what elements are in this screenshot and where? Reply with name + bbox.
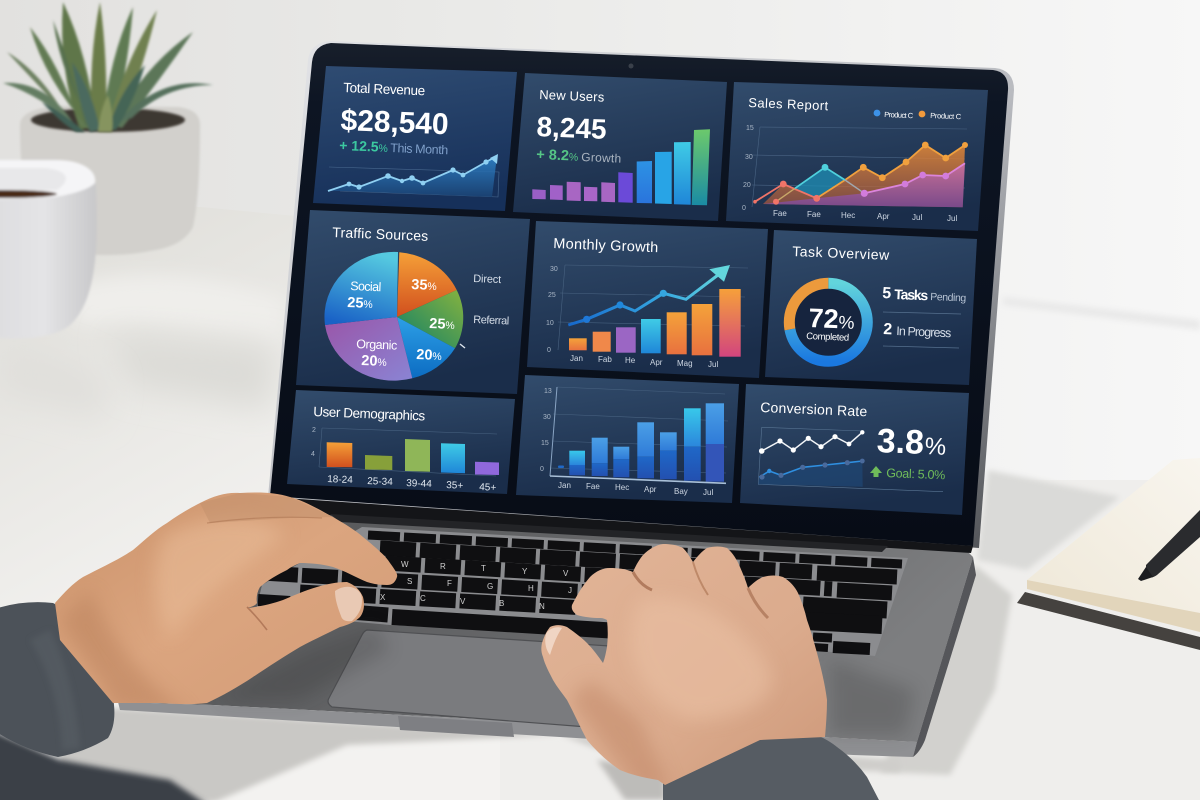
heading: traffic sources: Traffic Sources — [332, 224, 429, 244]
stat: tasks pending — [882, 285, 967, 304]
bar and line chart: growth: Apr — [650, 358, 663, 367]
pie chart: traffic: 20% — [361, 353, 387, 370]
area chart: sales: 0 — [742, 205, 746, 212]
page edges — [1027, 580, 1200, 632]
screen bezel — [270, 43, 1008, 546]
key letters: C — [420, 594, 426, 603]
value: users: 8,245 — [536, 111, 607, 145]
stacked bar chart: Jan — [558, 481, 571, 490]
key letters: T — [481, 564, 486, 573]
dashboard panel: user demographics — [287, 390, 515, 494]
left sleeve — [0, 602, 215, 800]
webcam — [628, 64, 634, 68]
dashboard panel: sales report — [726, 82, 988, 231]
silver lid edge — [268, 41, 1014, 548]
dashboard panel: total revenue — [313, 66, 517, 211]
stacked bar chart — [540, 387, 728, 497]
legend: products — [874, 110, 962, 121]
dashboard panel: monthly growth — [527, 221, 768, 378]
value: revenue: $28,540 — [340, 104, 449, 141]
notebook cover — [1017, 592, 1200, 650]
trackpad — [328, 630, 610, 728]
bar chart: demographics: 45+ — [479, 482, 497, 494]
change: users: + 8.2% — [536, 147, 579, 165]
key letters: W — [401, 560, 409, 569]
notebook paper — [1027, 458, 1200, 613]
bar chart: demographics: 25-34 — [367, 476, 393, 488]
area chart: sales: Fae — [773, 209, 787, 218]
key letters: V — [460, 597, 466, 606]
bar and line chart: growth — [546, 265, 748, 369]
right hand — [541, 544, 827, 785]
laptop base — [118, 505, 976, 757]
stat: tasks pending: Pending — [930, 291, 967, 304]
dashboard panel: stacked bars — [516, 375, 739, 503]
bar and line chart: growth: Jul — [708, 360, 718, 369]
area chart: sales: 30 — [745, 154, 753, 161]
area chart: sales: Apr — [877, 212, 890, 221]
stacked bar chart: 30 — [543, 414, 551, 421]
right sleeve — [663, 725, 880, 800]
stacked bar chart: Hec — [615, 483, 629, 492]
dashboard panel: new users — [513, 73, 727, 221]
pie chart: traffic: 20% — [416, 347, 442, 364]
heading: total revenue: Total Revenue — [343, 80, 426, 98]
shadow on table right of laptop — [880, 565, 1012, 775]
key letters — [380, 560, 572, 611]
shadow on table behind lid — [977, 470, 1120, 570]
legend: products: Product C — [884, 110, 914, 120]
value: conversion: 3.8% — [876, 422, 947, 463]
pie chart: traffic: Organic — [356, 337, 398, 353]
bar and line chart: growth: Fab — [598, 355, 612, 364]
torso shadow — [0, 725, 215, 800]
change: users — [536, 147, 622, 166]
bar chart: demographics: 4 — [311, 451, 315, 458]
bar and line chart: growth: 10 — [546, 320, 554, 327]
key letters: V — [563, 569, 569, 578]
pen — [1138, 510, 1200, 581]
arrow: growth trend — [709, 265, 730, 282]
notebook and pen — [1017, 458, 1200, 650]
bar and line chart: growth: 0 — [547, 347, 551, 354]
thumbnail — [335, 587, 362, 621]
plant pot — [20, 106, 200, 255]
area chart: sales: Jul — [947, 214, 957, 223]
bar and line chart: growth: 30 — [550, 266, 558, 273]
pie chart: traffic: Social — [350, 279, 382, 294]
key letters: Y — [522, 567, 528, 576]
key letters: B — [499, 599, 504, 608]
area chart: sales — [742, 125, 968, 223]
area chart: sales: 15 — [746, 125, 754, 132]
stat: in progress — [883, 321, 952, 340]
key letters: F — [447, 579, 452, 588]
heading: task overview: Task Overview — [792, 243, 890, 263]
area chart: sales: Jul — [912, 213, 922, 222]
area chart: sales: Fae — [807, 210, 821, 219]
dashboard panel: task overview — [765, 230, 977, 385]
bar and line chart: growth: 25 — [548, 292, 556, 299]
heading: conversion rate: Conversion Rate — [760, 399, 868, 419]
bar chart: demographics: 18-24 — [327, 474, 353, 486]
dashboard panel: conversion rate — [740, 384, 969, 515]
change: revenue: This Month — [390, 141, 449, 157]
legend: products: Product C — [930, 111, 962, 121]
front notch — [398, 716, 514, 737]
pie chart: traffic — [324, 252, 463, 381]
keyboard deck — [118, 505, 973, 742]
coffee cup — [0, 160, 97, 339]
change: users: Growth — [581, 150, 622, 166]
change: revenue — [339, 137, 449, 157]
bar chart: demographics: 2 — [312, 427, 316, 434]
key letters: H — [528, 584, 534, 593]
key letters: G — [487, 582, 493, 591]
stat: in progress: In Progress — [896, 324, 952, 340]
donut chart: tasks: Completed — [806, 331, 849, 344]
stacked bar chart: 15 — [541, 440, 549, 447]
key letters: S — [407, 577, 412, 586]
left hand — [55, 492, 398, 704]
stacked bar chart: Jul — [703, 488, 713, 497]
pie chart: traffic: 25% — [429, 316, 455, 333]
sparkline: revenue — [328, 154, 499, 197]
bar and line chart: growth: Mag — [677, 359, 693, 368]
stat: in progress: 2 — [883, 321, 893, 338]
bar and line chart: growth: Jan — [570, 354, 583, 363]
stacked bar chart: Fae — [586, 482, 600, 491]
bar chart: demographics — [311, 427, 499, 494]
stacked bar chart: Apr — [644, 485, 657, 494]
bar chart: users — [532, 129, 710, 205]
pie chart: traffic: 35% — [411, 277, 437, 294]
area chart: sales: Hec — [841, 211, 855, 220]
legend: referral: Referral — [473, 314, 509, 327]
bar chart: demographics: 35+ — [446, 480, 464, 492]
shadow on table below laptop — [60, 708, 560, 800]
bar and line chart: growth: He — [625, 356, 636, 365]
heading: user demographics: User Demographics — [313, 404, 426, 424]
front edge — [118, 702, 917, 757]
thumbnail — [545, 627, 562, 655]
key letters: X — [380, 593, 386, 602]
stacked bar chart: 13 — [544, 388, 552, 395]
plant leaves — [3, 2, 213, 132]
stacked bar chart: Bay — [674, 487, 688, 496]
area chart: sales: 20 — [743, 182, 751, 189]
potted plant — [3, 2, 213, 255]
pie chart: traffic: 25% — [347, 295, 373, 312]
donut chart: tasks — [789, 283, 867, 361]
hand shadows on laptop deck — [215, 625, 915, 735]
stacked bar chart: 0 — [540, 466, 544, 473]
keyboard — [256, 527, 908, 656]
dashboard panel: traffic sources — [296, 210, 530, 394]
key letters: N — [539, 602, 545, 611]
legend: direct: Direct — [473, 273, 501, 286]
key letters: J — [568, 586, 572, 595]
heading: new users: New Users — [539, 87, 605, 105]
soil — [31, 108, 185, 132]
stat: tasks pending: Tasks — [894, 286, 929, 303]
change: revenue: + 12.5% — [339, 137, 388, 155]
goal with up arrow: Goal: 5.0% — [886, 466, 946, 482]
stat: tasks pending: 5 — [882, 285, 892, 302]
hinge band — [268, 497, 973, 553]
donut chart: tasks: 72% — [808, 303, 855, 335]
bar chart: demographics: 39-44 — [406, 478, 432, 490]
heading: monthly growth: Monthly Growth — [553, 236, 659, 256]
key letters: R — [440, 562, 446, 571]
line chart: conversion — [758, 427, 943, 492]
heading: sales report: Sales Report — [748, 95, 829, 113]
laptop lid — [268, 41, 1014, 553]
coffee — [0, 190, 57, 198]
